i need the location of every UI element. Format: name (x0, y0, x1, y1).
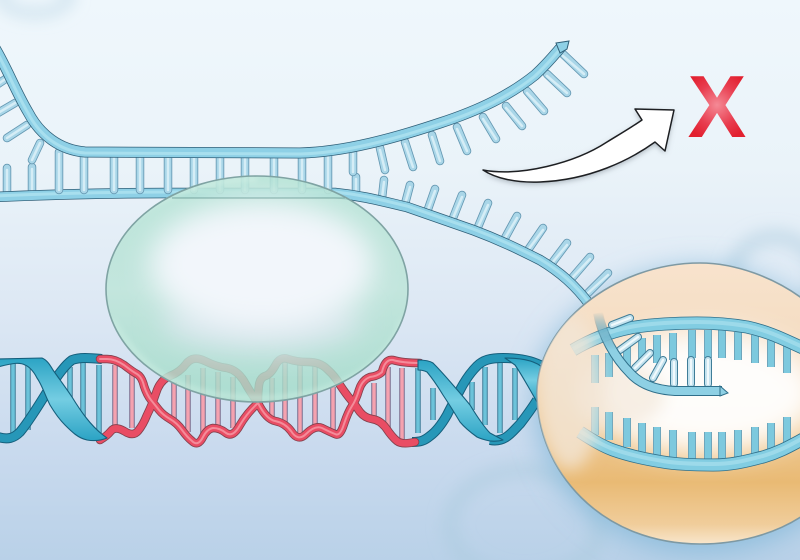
green protein blob (106, 176, 408, 402)
blue glow around orange blob (535, 268, 800, 552)
primer strand (598, 313, 728, 396)
primer rungs (612, 318, 708, 384)
curved white arrow (483, 109, 674, 184)
pale centre highlight (575, 331, 800, 455)
red X mark: X (688, 57, 746, 156)
upper strand with rungs (0, 41, 584, 190)
lower template strand with rungs (0, 167, 608, 305)
red wavy strands (100, 358, 420, 443)
upper strand rungs (0, 54, 584, 190)
DNA inside orange blob (538, 313, 800, 470)
lower strand rungs (7, 167, 608, 293)
blob outline (106, 176, 408, 402)
upper strand backbone (0, 41, 569, 154)
blue back ribbons (0, 358, 540, 442)
left haze over strand ends (538, 314, 602, 470)
blob pale interior (110, 179, 403, 398)
red rungs (115, 362, 402, 442)
lower strand backbone (0, 192, 590, 305)
orange protein blob (537, 263, 800, 544)
blue rungs (13, 362, 515, 433)
inner template strands (573, 322, 800, 465)
double helix DNA (0, 358, 543, 443)
blue front ribbons (0, 358, 543, 441)
inner rungs (595, 330, 787, 462)
